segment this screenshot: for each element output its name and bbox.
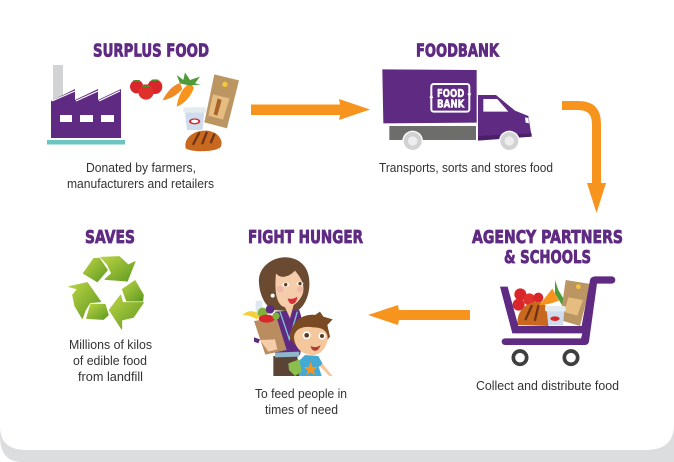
truck logo: BANK: [437, 98, 465, 111]
heading: foodbank: FOODBANK: [416, 42, 500, 62]
heading: fight hunger: FIGHT HUNGER: [248, 228, 363, 248]
heading: saves: SAVES: [85, 228, 135, 248]
icon: factory: [47, 65, 125, 144]
heading: agency partners and schools: [472, 228, 623, 268]
panel: surplus food: [47, 42, 239, 191]
text: surplus food description: Donated by farmers,: [86, 161, 196, 175]
text: fight hunger description: [255, 387, 347, 417]
panel: foodbank: [379, 42, 553, 175]
heading: surplus food: SURPLUS FOOD: [93, 42, 209, 62]
panel: saves: [69, 228, 152, 384]
icon: recycling arrows: [69, 257, 143, 329]
text: saves description: [69, 338, 152, 384]
text: surplus food description: manufacturers and retailers: [67, 177, 214, 191]
panel: fight hunger: [243, 228, 363, 417]
text: fight hunger description: To feed people in: [255, 387, 347, 401]
icon: food items: [130, 72, 239, 151]
arrow: foodbank to agency partners: [562, 101, 606, 213]
arrow: agency partners to fight hunger: [368, 305, 470, 325]
icon: shopping cart with food: [500, 276, 615, 364]
heading: agency partners and schools: AGENCY PARTNERS: [472, 228, 623, 248]
icon: delivery truck: [382, 69, 532, 151]
text: fight hunger description: times of need: [265, 403, 338, 417]
heading: agency partners and schools: & SCHOOLS: [504, 248, 591, 268]
text: surplus food description: [67, 161, 214, 191]
icon: mother and child with groceries: [243, 257, 333, 376]
arrow: surplus food to foodbank: [251, 99, 370, 120]
panel: agency partners and schools: [472, 228, 623, 393]
text: saves description: Millions of kilos: [69, 338, 152, 352]
text: agency description: Collect and distribute food: [476, 379, 619, 393]
text: foodbank description: Transports, sorts and stores food: [379, 161, 553, 175]
text: saves description: from landfill: [78, 370, 143, 384]
truck logo: FOOD: [437, 87, 464, 100]
text: saves description: of edible food: [73, 354, 147, 368]
truck logo: [429, 84, 471, 112]
